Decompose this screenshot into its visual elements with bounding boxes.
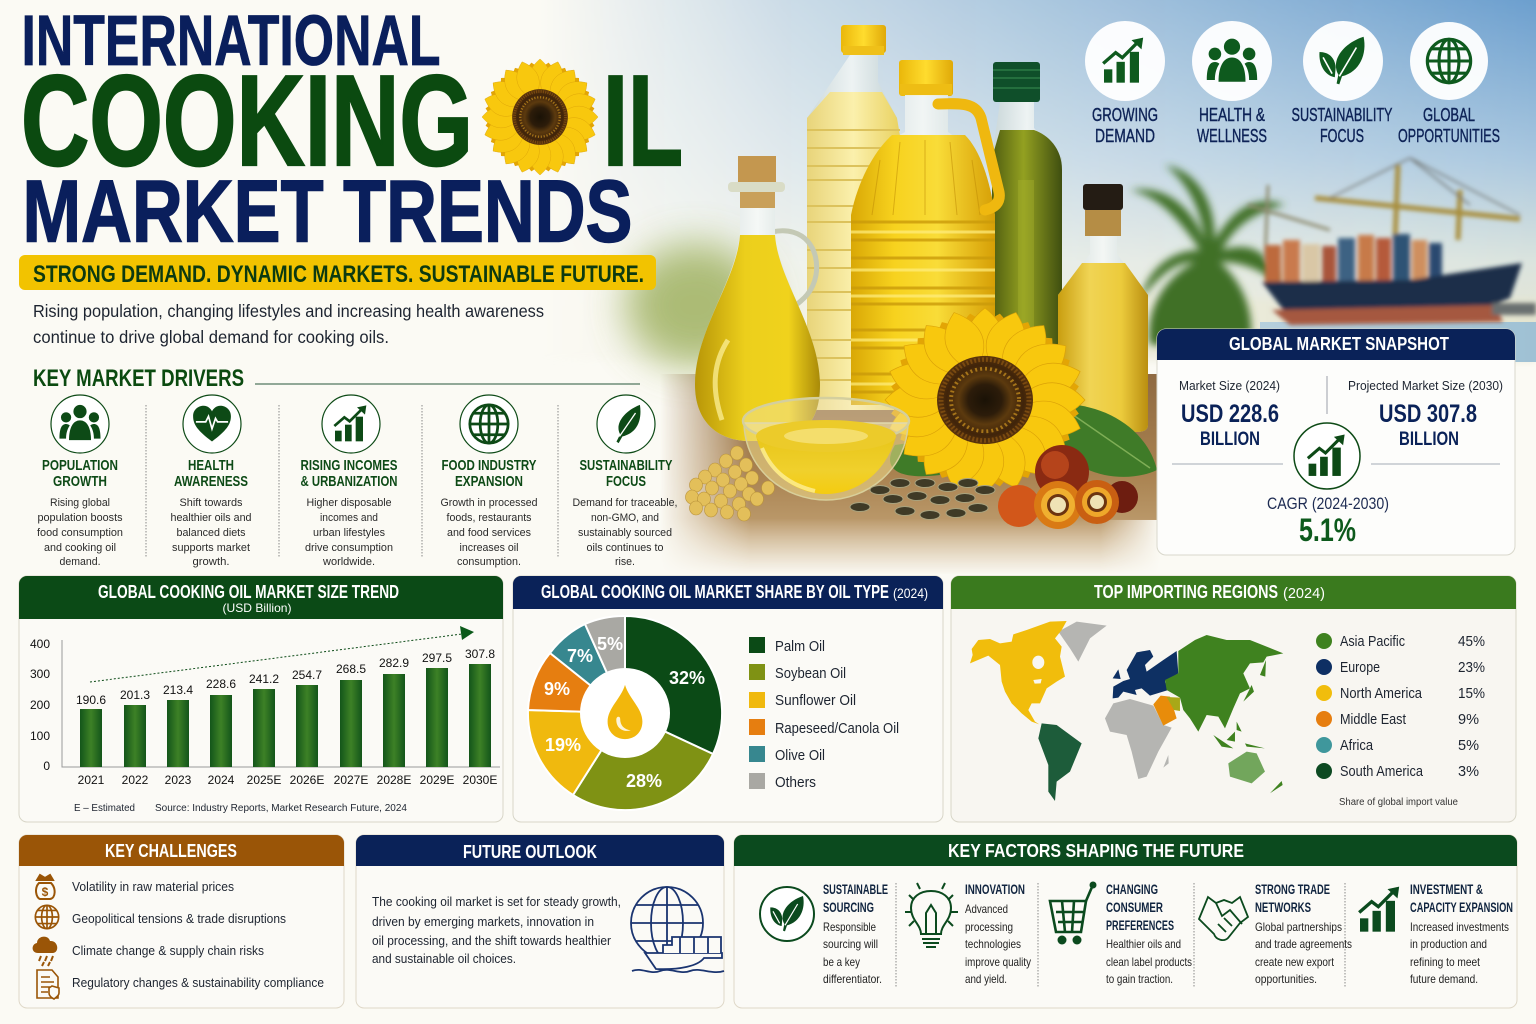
driver: population growth: population boosts <box>38 512 123 524</box>
driver: sustainability focus: Demand for traceable, <box>572 497 678 509</box>
driver: population growth <box>37 395 123 568</box>
bar chart: 200 <box>30 698 50 712</box>
value: projected market size 2030 <box>1379 400 1477 450</box>
driver: food industry expansion: FOOD INDUSTRY <box>442 457 536 474</box>
soybeans <box>686 446 774 521</box>
panel: future outlook <box>356 835 724 1008</box>
small right bottle <box>1058 184 1148 432</box>
container ship and cranes <box>1248 158 1536 325</box>
bar chart: 2021 <box>78 773 105 787</box>
outlook text: driven by emerging markets, innovation in <box>372 914 594 929</box>
driver: food industry expansion: and food services <box>447 527 531 539</box>
driver: health awareness: healthier oils and <box>170 512 252 524</box>
factor: sustainable sourcing: differentiator. <box>823 972 882 986</box>
bar chart: 213.4 <box>163 683 193 697</box>
icon: money bag: $ <box>42 885 49 899</box>
legend: oil types: Palm Oil <box>775 638 825 655</box>
back clear bottle <box>807 25 900 410</box>
legend: import shares: Middle East <box>1340 711 1407 728</box>
challenges list: Climate change & supply chain risks <box>72 943 264 958</box>
panel: top importing regions: TOP IMPORTING REGIONS <box>1094 582 1278 602</box>
factor: changing consumer preferences: CHANGING <box>1106 882 1158 897</box>
icon: growing demand <box>1085 21 1165 101</box>
bar chart: 100 <box>30 729 50 743</box>
factor: changing consumer preferences <box>1050 882 1192 986</box>
bar chart: 2027E <box>334 773 368 787</box>
factor: sustainable sourcing: sourcing will <box>823 937 878 951</box>
icon: growth chart circle <box>1294 423 1360 489</box>
panel: global market snapshot <box>1157 329 1515 555</box>
bar chart: 282.9 <box>379 656 409 670</box>
legend: oil types: Sunflower Oil <box>775 692 856 709</box>
donut chart: 9% <box>544 679 570 699</box>
theme labels: FOCUS <box>1320 126 1364 146</box>
donut chart: 28% <box>626 771 662 791</box>
factor: sustainable sourcing: be a key <box>823 955 860 969</box>
legend: oil types <box>749 637 899 791</box>
bar chart: 201.3 <box>120 688 150 702</box>
palm fruits <box>998 445 1138 529</box>
bar chart <box>30 637 500 787</box>
outlook text: and sustainable oil choices. <box>372 951 516 966</box>
legend: import shares: 3% <box>1458 763 1479 780</box>
driver: sustainability focus: rise. <box>615 556 635 568</box>
bar chart: 300 <box>30 667 50 681</box>
arrow: upward trend <box>90 626 474 682</box>
factor: strong trade networks: create new export <box>1255 955 1335 969</box>
bar chart: 190.6 <box>76 693 106 707</box>
driver: population growth: POPULATION <box>42 457 118 474</box>
bar chart: 2029E <box>420 773 454 787</box>
oil bottles <box>695 25 1148 441</box>
legend: import shares: Asia Pacific <box>1340 633 1405 650</box>
value: market size 2024: BILLION <box>1200 429 1260 450</box>
large yellow jug <box>851 60 999 405</box>
driver: sustainability focus: SUSTAINABILITY <box>580 457 672 474</box>
factor: investment and capacity expansion: refining to meet <box>1410 955 1481 969</box>
title: IL <box>603 49 683 193</box>
driver: food industry expansion <box>440 395 538 568</box>
driver: population growth: food consumption <box>37 527 123 539</box>
factor: changing consumer preferences: PREFERENCES <box>1106 918 1174 933</box>
driver: rising incomes and urbanization <box>300 395 398 568</box>
value: market size 2024 <box>1181 400 1279 450</box>
intro paragraph: Rising population, changing lifestyles and increasing health awareness <box>33 301 544 321</box>
driver: population growth: GROWTH <box>53 473 107 490</box>
driver: food industry expansion: consumption. <box>457 556 521 568</box>
sunflower seeds <box>850 478 995 520</box>
icon: globe with cargo ship <box>631 887 724 972</box>
driver: food industry expansion: foods, restaurants <box>446 512 532 524</box>
legend: oil types: Rapeseed/Canola Oil <box>775 720 899 737</box>
title <box>21 2 683 260</box>
factor: strong trade networks: NETWORKS <box>1255 900 1311 915</box>
panel: global market snapshot: Market Size (2024) <box>1179 378 1280 393</box>
legend: oil types: Others <box>775 774 816 791</box>
legend: import shares: 9% <box>1458 711 1479 728</box>
panel: global market snapshot: GLOBAL MARKET SNAPSHOT <box>1229 334 1449 354</box>
legend: import shares: Share of global import value <box>1339 797 1458 808</box>
panel: key challenges <box>19 835 344 1008</box>
legend: import shares: 15% <box>1458 685 1485 702</box>
factor: sustainable sourcing <box>760 882 888 986</box>
bar chart: 228.6 <box>206 677 236 691</box>
value: CAGR <box>1267 494 1389 548</box>
driver: rising incomes and urbanization: urban lifestyles <box>313 527 385 539</box>
outlook text <box>372 894 621 966</box>
legend: import shares: 23% <box>1458 659 1485 676</box>
bar chart: 400 <box>30 637 50 651</box>
factor: innovation: and yield. <box>965 972 1007 986</box>
factor: sustainable sourcing: SOURCING <box>823 900 874 915</box>
driver: food industry expansion: Growth in processed <box>440 497 538 509</box>
donut chart <box>528 616 722 810</box>
driver: health awareness: HEALTH <box>188 457 234 474</box>
icon: global opportunities <box>1410 22 1488 100</box>
tagline banner: STRONG DEMAND. DYNAMIC MARKETS. SUSTAINABLE FUTURE. <box>33 261 644 288</box>
world map <box>970 621 1283 801</box>
olive oil bottle <box>992 62 1062 430</box>
driver: health awareness: growth. <box>192 556 230 568</box>
theme labels: GLOBAL <box>1423 105 1475 125</box>
factor: investment and capacity expansion <box>1359 882 1513 986</box>
title: MARKET TRENDS <box>22 162 632 260</box>
legend: import shares <box>1316 633 1485 808</box>
tagline banner <box>19 255 656 290</box>
legend: import shares: 5% <box>1458 737 1479 754</box>
glass carafe <box>695 156 820 441</box>
factor: strong trade networks: and trade agreements <box>1255 937 1352 951</box>
factor: investment and capacity expansion: in production and <box>1410 937 1487 951</box>
driver: food industry expansion: increases oil <box>460 542 518 554</box>
donut chart: 32% <box>669 668 705 688</box>
donut chart: 19% <box>545 735 581 755</box>
panel: market size trend chart: (USD Billion) <box>222 601 292 615</box>
driver: health awareness: supports market <box>172 542 250 554</box>
value: projected market size 2030: USD 307.8 <box>1379 400 1477 428</box>
bar chart: 2030E <box>463 773 497 787</box>
driver: food industry expansion: EXPANSION <box>455 473 523 490</box>
icon: health and wellness <box>1192 21 1272 101</box>
driver: rising incomes and urbanization: drive consumption <box>305 542 393 554</box>
icon: storm cloud <box>33 937 57 966</box>
panel: key factors shaping the future: KEY FACTORS SHAPING THE FUTURE <box>948 841 1244 861</box>
driver: sustainability focus <box>572 395 678 568</box>
driver: rising incomes and urbanization: worldwide. <box>322 556 375 568</box>
bar chart: 254.7 <box>292 668 322 682</box>
sunflower with leaf <box>875 299 1157 501</box>
bar chart: 2022 <box>122 773 149 787</box>
icon: sunflower as letter O <box>476 53 604 181</box>
challenges list: Regulatory changes & sustainability compliance <box>72 975 324 990</box>
legend: oil types: Soybean Oil <box>775 665 846 682</box>
icon: globe <box>35 905 59 929</box>
donut chart: 7% <box>567 646 593 666</box>
value: CAGR: 5.1% <box>1299 512 1356 548</box>
challenges list: Geopolitical tensions & trade disruptions <box>72 911 286 926</box>
outlook text: oil processing, and the shift towards healthier <box>372 933 612 948</box>
challenges list <box>72 879 324 990</box>
factor: innovation: INNOVATION <box>965 882 1025 897</box>
icon: oil drop <box>608 685 642 739</box>
factor: changing consumer preferences: to gain traction. <box>1106 972 1173 986</box>
value: CAGR: CAGR (2024-2030) <box>1267 494 1389 513</box>
factor: innovation: processing <box>965 920 1013 934</box>
icon: sustainability focus <box>1303 21 1383 101</box>
value: market size 2024: USD 228.6 <box>1181 400 1279 428</box>
bar chart: 268.5 <box>336 662 366 676</box>
bar chart: 2024 <box>208 773 235 787</box>
hero photo scene <box>540 0 1536 574</box>
driver: sustainability focus: sustainably sourced <box>578 527 672 539</box>
top-right theme icons <box>1085 21 1500 146</box>
bar chart: 2028E <box>377 773 411 787</box>
legend: import shares: 45% <box>1458 633 1485 650</box>
legend: import shares: Africa <box>1340 737 1374 754</box>
glass bowl of oil <box>743 398 909 500</box>
driver: population growth: Rising global <box>50 497 110 509</box>
title: COOKING <box>21 49 473 193</box>
bar chart: 297.5 <box>422 651 452 665</box>
driver: population growth: demand. <box>60 556 100 568</box>
factor: changing consumer preferences: CONSUMER <box>1106 900 1163 915</box>
driver: sustainability focus: oils continues to <box>586 542 664 554</box>
icon: regulation document <box>37 970 59 999</box>
title: INTERNATIONAL <box>22 2 440 81</box>
bar chart: 0 <box>43 759 50 773</box>
legend: import shares: South America <box>1340 763 1424 780</box>
panel: key factors shaping the future <box>734 835 1517 1008</box>
value: projected market size 2030: BILLION <box>1399 429 1459 450</box>
factor: changing consumer preferences: clean label products <box>1106 955 1192 969</box>
legend: oil types: Olive Oil <box>775 747 825 764</box>
panel: top importing regions <box>951 576 1516 822</box>
driver: health awareness <box>170 395 252 568</box>
bar chart: 2023 <box>165 773 192 787</box>
factor: innovation: Advanced <box>965 902 1008 916</box>
legend: import shares: North America <box>1340 685 1423 702</box>
wooden table <box>640 374 1160 574</box>
panel: market share by oil type: GLOBAL COOKING OIL MARKET SHARE BY OIL TYPE <box>541 582 889 602</box>
source note: E – Estimated <box>74 802 135 814</box>
theme labels: GROWING <box>1092 105 1158 125</box>
heading: key market drivers: KEY MARKET DRIVERS <box>33 365 244 392</box>
panel: market share by oil type <box>513 576 943 822</box>
theme labels: DEMAND <box>1095 126 1155 146</box>
driver: health awareness: AWARENESS <box>174 473 248 490</box>
driver: health awareness: balanced diets <box>176 527 246 539</box>
bar chart: 307.8 <box>465 647 495 661</box>
factor: changing consumer preferences: Healthier oils and <box>1106 937 1181 951</box>
legend: import shares: Europe <box>1340 659 1380 676</box>
driver: population growth: and cooking oil <box>44 542 116 554</box>
panel: market size trend chart <box>19 576 503 822</box>
blurred palm tree <box>1130 165 1285 345</box>
challenges list: Volatility in raw material prices <box>72 879 234 894</box>
driver: health awareness: Shift towards <box>180 497 243 509</box>
source note: Source: Industry Reports, Market Research Future, 2024 <box>155 802 407 814</box>
factor: innovation <box>905 882 1031 986</box>
theme labels: SUSTAINABILITY <box>1292 105 1392 125</box>
driver: rising incomes and urbanization: incomes and <box>320 512 378 524</box>
theme labels: HEALTH & <box>1199 105 1265 125</box>
factor: strong trade networks: opportunities. <box>1255 972 1317 986</box>
driver: sustainability focus: FOCUS <box>606 473 646 490</box>
panel: key market drivers <box>37 395 678 568</box>
factor: investment and capacity expansion: INVESTMENT & <box>1410 882 1483 897</box>
factor: innovation: improve quality <box>965 955 1031 969</box>
factor: investment and capacity expansion: Increased investments <box>1410 920 1509 934</box>
panel: global market snapshot: Projected Market Size (2030) <box>1348 378 1503 393</box>
bar chart: 2026E <box>290 773 324 787</box>
driver: sustainability focus: non-GMO, and <box>591 512 659 524</box>
driver: rising incomes and urbanization: Higher disposable <box>306 497 392 509</box>
factor: investment and capacity expansion: future demand. <box>1410 972 1478 986</box>
factor: strong trade networks <box>1199 882 1352 986</box>
factor: strong trade networks: STRONG TRADE <box>1255 882 1330 897</box>
intro paragraph: continue to drive global demand for cooking oils. <box>33 327 389 347</box>
driver: rising incomes and urbanization: RISING INCOMES <box>300 457 398 474</box>
bar chart: 2025E <box>247 773 281 787</box>
driver: rising incomes and urbanization: & URBANIZATION <box>300 473 398 490</box>
panel: market size trend chart: GLOBAL COOKING OIL MARKET SIZE TREND <box>98 582 399 602</box>
icon: money bag <box>36 875 55 899</box>
theme labels <box>1092 105 1500 146</box>
panel: top importing regions: (2024) <box>1283 585 1325 602</box>
panel: key challenges: KEY CHALLENGES <box>105 841 237 861</box>
donut chart: 5% <box>597 634 623 654</box>
factor: sustainable sourcing: SUSTAINABLE <box>823 882 888 897</box>
outlook text: The cooking oil market is set for steady growth, <box>372 894 621 909</box>
factor: innovation: technologies <box>965 937 1021 951</box>
factor: sustainable sourcing: Responsible <box>823 920 876 934</box>
panel: market share by oil type: (2024) <box>893 585 928 601</box>
intro paragraph <box>33 301 544 347</box>
theme labels: WELLNESS <box>1197 126 1267 146</box>
bar chart: 241.2 <box>249 672 279 686</box>
panel: future outlook: FUTURE OUTLOOK <box>463 842 597 862</box>
factor: strong trade networks: Global partnerships <box>1255 920 1342 934</box>
